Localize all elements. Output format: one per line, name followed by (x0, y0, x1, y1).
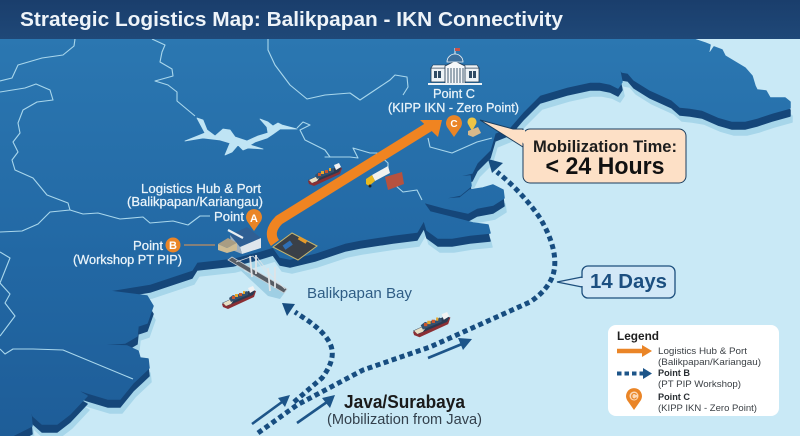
orange logistics arrow (272, 120, 442, 243)
label: logistics hub (127, 181, 263, 224)
label: logistics hub: Point (214, 209, 244, 224)
legend: orange arrow: (Balikpapan/Kariangau) (658, 357, 761, 368)
lake (185, 118, 297, 155)
legend: pin C: Point C (658, 392, 690, 403)
label: point C: Point C (433, 86, 475, 101)
container yard (273, 233, 317, 260)
label: point B (73, 238, 215, 267)
title: Strategic Logistics Map: Balikpapan - IKN Connectivity (20, 9, 564, 31)
icon: gold marker and box (468, 117, 481, 137)
pin A: A (250, 213, 258, 225)
legend: dotted arrow: (PT PIP Workshop) (658, 379, 741, 390)
label: Java/Surabaya: Java/Surabaya (344, 392, 466, 412)
label: Java/Surabaya (327, 392, 482, 428)
pin A (246, 209, 262, 231)
ship: Balikpapan Bay (222, 286, 256, 309)
label: logistics hub: Logistics Hub & Port (141, 181, 261, 196)
legend: orange arrow (617, 345, 761, 368)
legend: pin C: C (631, 392, 638, 402)
legend: dotted arrow (617, 368, 741, 390)
callout: 14 days (557, 266, 675, 298)
rivers (0, 39, 492, 379)
callout: mobilization time (480, 120, 686, 183)
ship: upper channel (308, 163, 342, 186)
label: point C (388, 86, 519, 115)
legend (608, 325, 779, 416)
pin C (446, 115, 462, 137)
current arrows (252, 338, 472, 424)
label: point B: B (169, 240, 177, 252)
label: Balikpapan Bay: Balikpapan Bay (307, 285, 412, 302)
legend: dotted arrow: Point B (658, 368, 690, 379)
header bar (0, 0, 800, 39)
label: point C: (KIPP IKN - Zero Point) (388, 100, 519, 115)
legend: pin C: (KIPP IKN - Zero Point) (658, 403, 757, 414)
logistics hub building (218, 227, 261, 254)
dotted sea route: Java to Point C (258, 159, 555, 433)
truck (366, 166, 390, 188)
callout: 14 days: 14 Days (590, 271, 667, 293)
icon: government palace (428, 48, 482, 85)
label: point B: (Workshop PT PIP) (73, 252, 182, 267)
legend: pin C (626, 388, 757, 414)
dotted sea route: Java to Balikpapan Bay (282, 303, 332, 402)
bridge (228, 255, 287, 299)
label: Java/Surabaya: (Mobilization from Java) (327, 412, 482, 428)
container (385, 172, 404, 190)
callout: mobilization time: < 24 Hours (546, 153, 664, 180)
label: logistics hub: (Balikpapan/Kariangau) (127, 194, 263, 209)
label: point B: Point (133, 238, 163, 253)
legend: orange arrow: Logistics Hub & Port (658, 346, 747, 357)
legend: Legend (617, 329, 659, 343)
callout: mobilization time: Mobilization Time: (533, 138, 677, 156)
pin C: C (450, 119, 458, 130)
ship: open sea (413, 312, 450, 337)
